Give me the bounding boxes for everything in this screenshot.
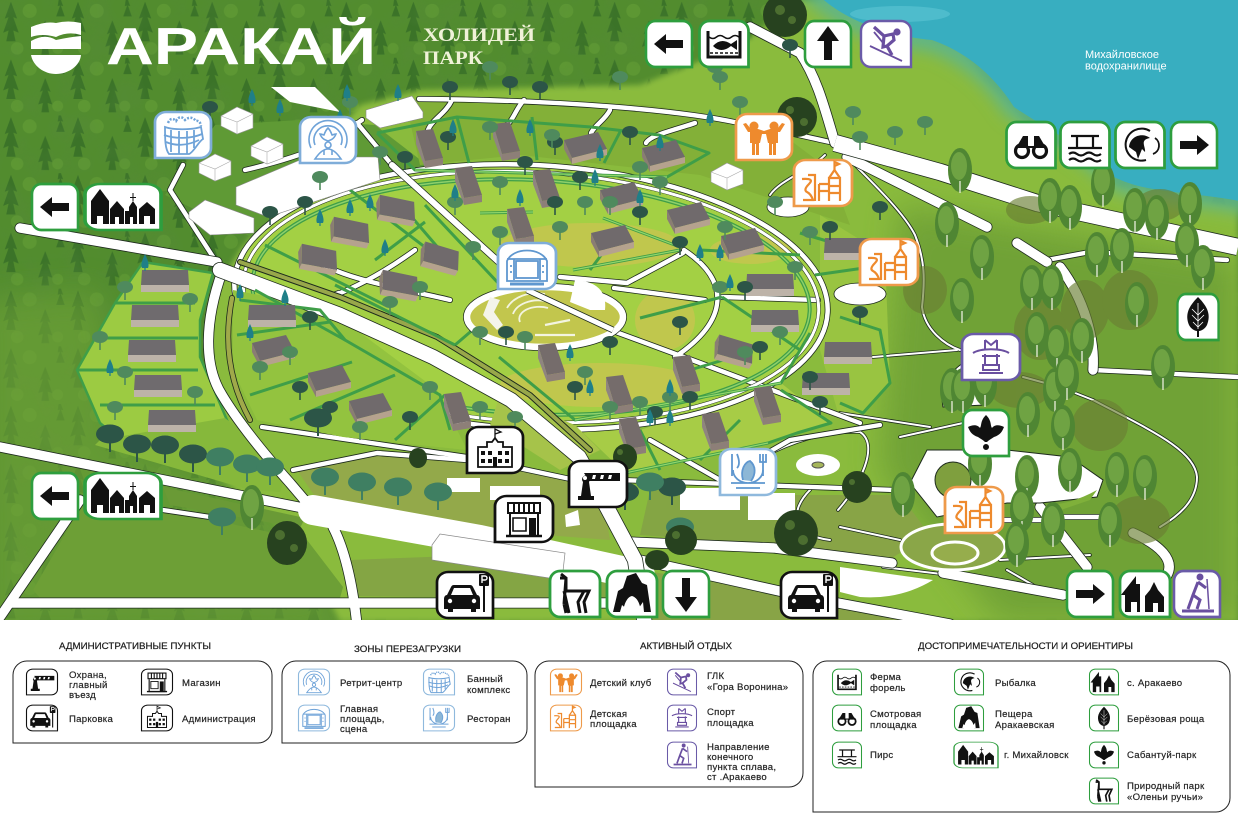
legend text: security: Охрана, [69,670,107,681]
icon: shop [495,496,553,542]
legend text: administration: Администрация [182,714,256,725]
map background: forest [0,0,1238,640]
icon: playground one [794,160,852,206]
icon: arrow to trout farm [646,21,692,67]
legend item: fishing [954,669,984,695]
legend item: pier [832,742,862,768]
icon: arrow to Arakaevo [1067,571,1113,617]
panel frame [13,661,272,743]
legend item: playground [550,705,582,731]
panel: sights and landmarks [813,641,1230,812]
legend text: playground: Детская [590,709,627,720]
icon: playground three [945,487,1003,533]
legend text: rafting finish: пункта сплава, [707,762,776,773]
logo emblem [31,22,81,74]
legend text: trout farm: Ферма [870,672,902,683]
legend text: bath complex: Банный [467,674,503,685]
small triangle lawn [163,487,305,528]
icon: viewpoint [1006,122,1056,168]
icon: restaurant [720,449,776,495]
legend background panel [0,620,1238,813]
reservoir label: Михайловское [1085,49,1159,61]
icon: trout farm [700,21,748,67]
logo: Arakai [31,17,535,76]
icon: security gate [569,461,627,507]
south-west lawn [233,290,467,450]
legend item: parking [26,705,58,731]
legend item: viewpoint [832,705,862,731]
legend item: birch grove [1090,705,1118,731]
icon: Sabantuy park [963,410,1009,456]
legend text: Mikhailovsk: г. Михайловск [1004,750,1069,761]
legend text: ski complex: «Гора Воронина» [707,682,788,693]
legend item: rafting finish [668,742,696,768]
icon: north arrow [805,21,851,67]
legend text: main square: сцена [340,724,368,735]
icon: Mikhailovsk town lower [85,473,161,519]
legend text: sports ground: Спорт [707,707,736,718]
legend text: Arakaevo: с. Аракаево [1127,678,1182,689]
legend text: security: въезд [69,690,96,701]
legend text: bath complex: комплекс [467,685,510,696]
legend item: Sabantuy park [1090,742,1118,768]
panel frame [282,661,527,743]
panel frame [535,661,803,787]
legend text: playground: площадка [590,719,637,730]
lawn below the oval [233,290,467,450]
heading: administrative points: АДМИНИСТРАТИВНЫЕ ПУНКТЫ [59,641,211,652]
panel: administrative points [13,641,272,743]
legend text: trout farm: форель [870,683,906,694]
legend item: administration [142,705,172,731]
legend text: cave: Пещера [995,709,1033,720]
icon: ski complex [861,21,911,67]
icon: administration [467,427,523,473]
icon: rafting finish [1174,571,1220,617]
reservoir label: водохранилище [1085,60,1167,72]
legend text: deer park: Природный парк [1127,781,1205,792]
main oval ring road [227,150,835,444]
legend item: security [26,669,58,695]
legend text: viewpoint: площадка [870,720,917,731]
icon: birch grove [1178,294,1218,340]
legend item: bath complex [424,669,454,695]
icon: fishing [1116,122,1164,168]
icon: Arakaevo village [1120,571,1170,617]
icon: east arrow [1171,122,1217,168]
heading: sights and landmarks: ДОСТОПРИМЕЧАТЕЛЬНОСТИ И ОРИЕНТИРЫ [918,641,1133,652]
trees [92,0,1215,570]
icon: sports ground [962,334,1020,380]
icon: west arrow [32,184,78,230]
legend item: main square [298,705,330,731]
inner olive plots [500,223,790,407]
row of trees lawn [95,418,285,492]
icon: kids club [736,114,792,160]
ring lawn [227,150,835,444]
southern lawn with trees [297,453,610,540]
legend text: viewpoint: Смотровая [870,709,921,720]
legend text: birch grove: Берёзовая роща [1127,714,1205,725]
legend text: fishing: Рыбалка [995,678,1036,689]
icon: parking west [437,572,493,618]
legend text: main square: площадь, [340,714,385,725]
icon: pier [1060,122,1110,168]
icon: west arrow lower [32,473,78,519]
icon: Mikhailovsk town [85,184,161,230]
legend item: kids club [550,669,582,695]
legend item: Arakaevo [1090,669,1118,695]
legend text: rafting finish: ст .Аракаево [707,772,767,783]
south-west white and olive corners [490,395,600,470]
legend text: restaurant: Ресторан [467,714,511,725]
legend text: deer park: «Оленьи ручьи» [1127,792,1203,803]
light plot strip highlights [415,170,781,473]
legend text: cave: Аракаевская [995,720,1055,731]
legend item: retreat [298,669,330,695]
icon: playground two [860,239,918,285]
heading: active recreation: АКТИВНЫЙ ОТДЫХ [640,640,733,652]
icon: parking east [781,572,837,618]
Sabantuy park plaza [767,197,1103,597]
central plaza with amphitheatre [467,280,623,347]
legend text: security: главный [69,680,108,691]
east plots lawn [820,215,890,420]
south meadow [33,503,343,598]
legend text: sports ground: площадка [707,718,754,729]
legend item: trout farm [832,669,862,695]
legend text: main square: Главная [340,704,378,715]
legend item: Mikhailovsk [954,742,998,768]
legend text: rafting finish: конечного [707,752,753,763]
icon: cave [607,571,657,617]
panel: recharge zones [282,644,527,743]
legend text: parking: Парковка [69,714,113,725]
north plots lawn [405,95,850,225]
legend text: pier: Пирс [870,750,893,761]
main diagonal road over the oval [220,165,645,625]
legend item: sports ground [668,705,696,731]
Mikhailovskoe reservoir water [805,0,1238,205]
south plots lawn [575,383,831,473]
logo subtitle: ПАРК [423,48,483,69]
heading: recharge zones: ЗОНЫ ПЕРЕЗАГРУЗКИ [354,644,461,655]
logo subtitle: ХОЛИДЕЙ [423,24,535,46]
legend text: rafting finish: Направление [707,742,770,753]
road network [0,27,1238,625]
western neighbourhood lawn [77,262,227,440]
panel: active recreation [535,640,803,787]
legend item: deer park [1090,778,1118,804]
legend text: ski complex: ГЛК [707,671,724,682]
legend text: retreat: Ретрит-центр [340,678,402,689]
legend text: Sabantuy park: Сабантуй-парк [1127,750,1197,761]
icon: south arrow [663,571,709,617]
logo wordmark: АРАКАЙ [106,17,376,76]
lawns beside south road [350,490,785,600]
icon: retreat centre [300,117,356,163]
icon: main stage [498,243,556,289]
houses [128,122,872,456]
legend text: shop: Магазин [182,678,221,689]
white service buildings [189,87,795,580]
legend item: cave [954,705,984,731]
icon: bath complex [155,112,211,158]
south-east meadows [640,495,1000,622]
icon: deer park [550,571,600,617]
legend text: kids club: Детский клуб [590,678,652,689]
meadow: shore and eastern fields [210,0,1238,622]
panel frame [813,661,1230,812]
green plot boundaries [77,117,890,473]
legend item: ski complex [668,669,696,695]
legend item: restaurant [424,705,454,731]
legend item: shop [142,669,172,695]
service area lawn [165,120,440,245]
